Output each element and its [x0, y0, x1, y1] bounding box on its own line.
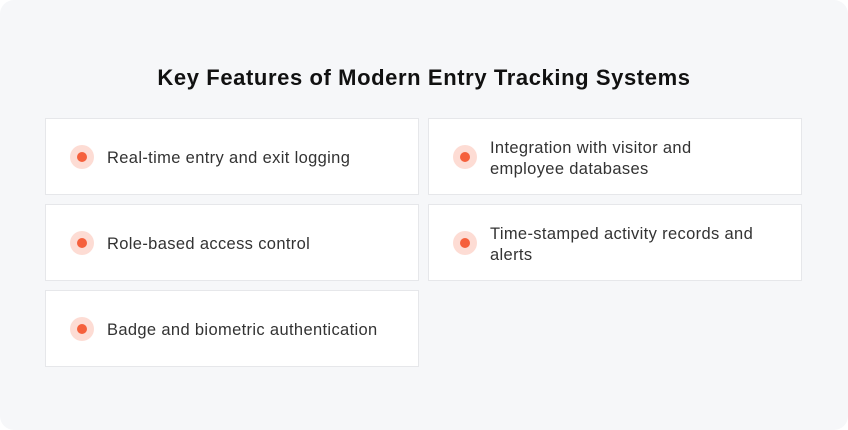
card: time-stamped records: Time-stamped activity records and [490, 224, 753, 242]
card: time-stamped records [428, 204, 802, 281]
card: real-time logging [45, 118, 419, 195]
card: integration [428, 118, 802, 195]
card: integration: Integration with visitor and [490, 138, 691, 156]
title: Key Features of Modern Entry Tracking Systems [157, 65, 691, 90]
card: time-stamped records: alerts [490, 246, 532, 264]
card: real-time logging: Real-time entry and exit logging [107, 149, 350, 167]
card: role-based access: Role-based access control [107, 235, 310, 253]
card: integration: employee databases [490, 160, 649, 178]
card: badge and biometric: Badge and biometric authentication [107, 321, 378, 339]
card: role-based access [45, 204, 419, 281]
card: badge and biometric [45, 290, 419, 367]
